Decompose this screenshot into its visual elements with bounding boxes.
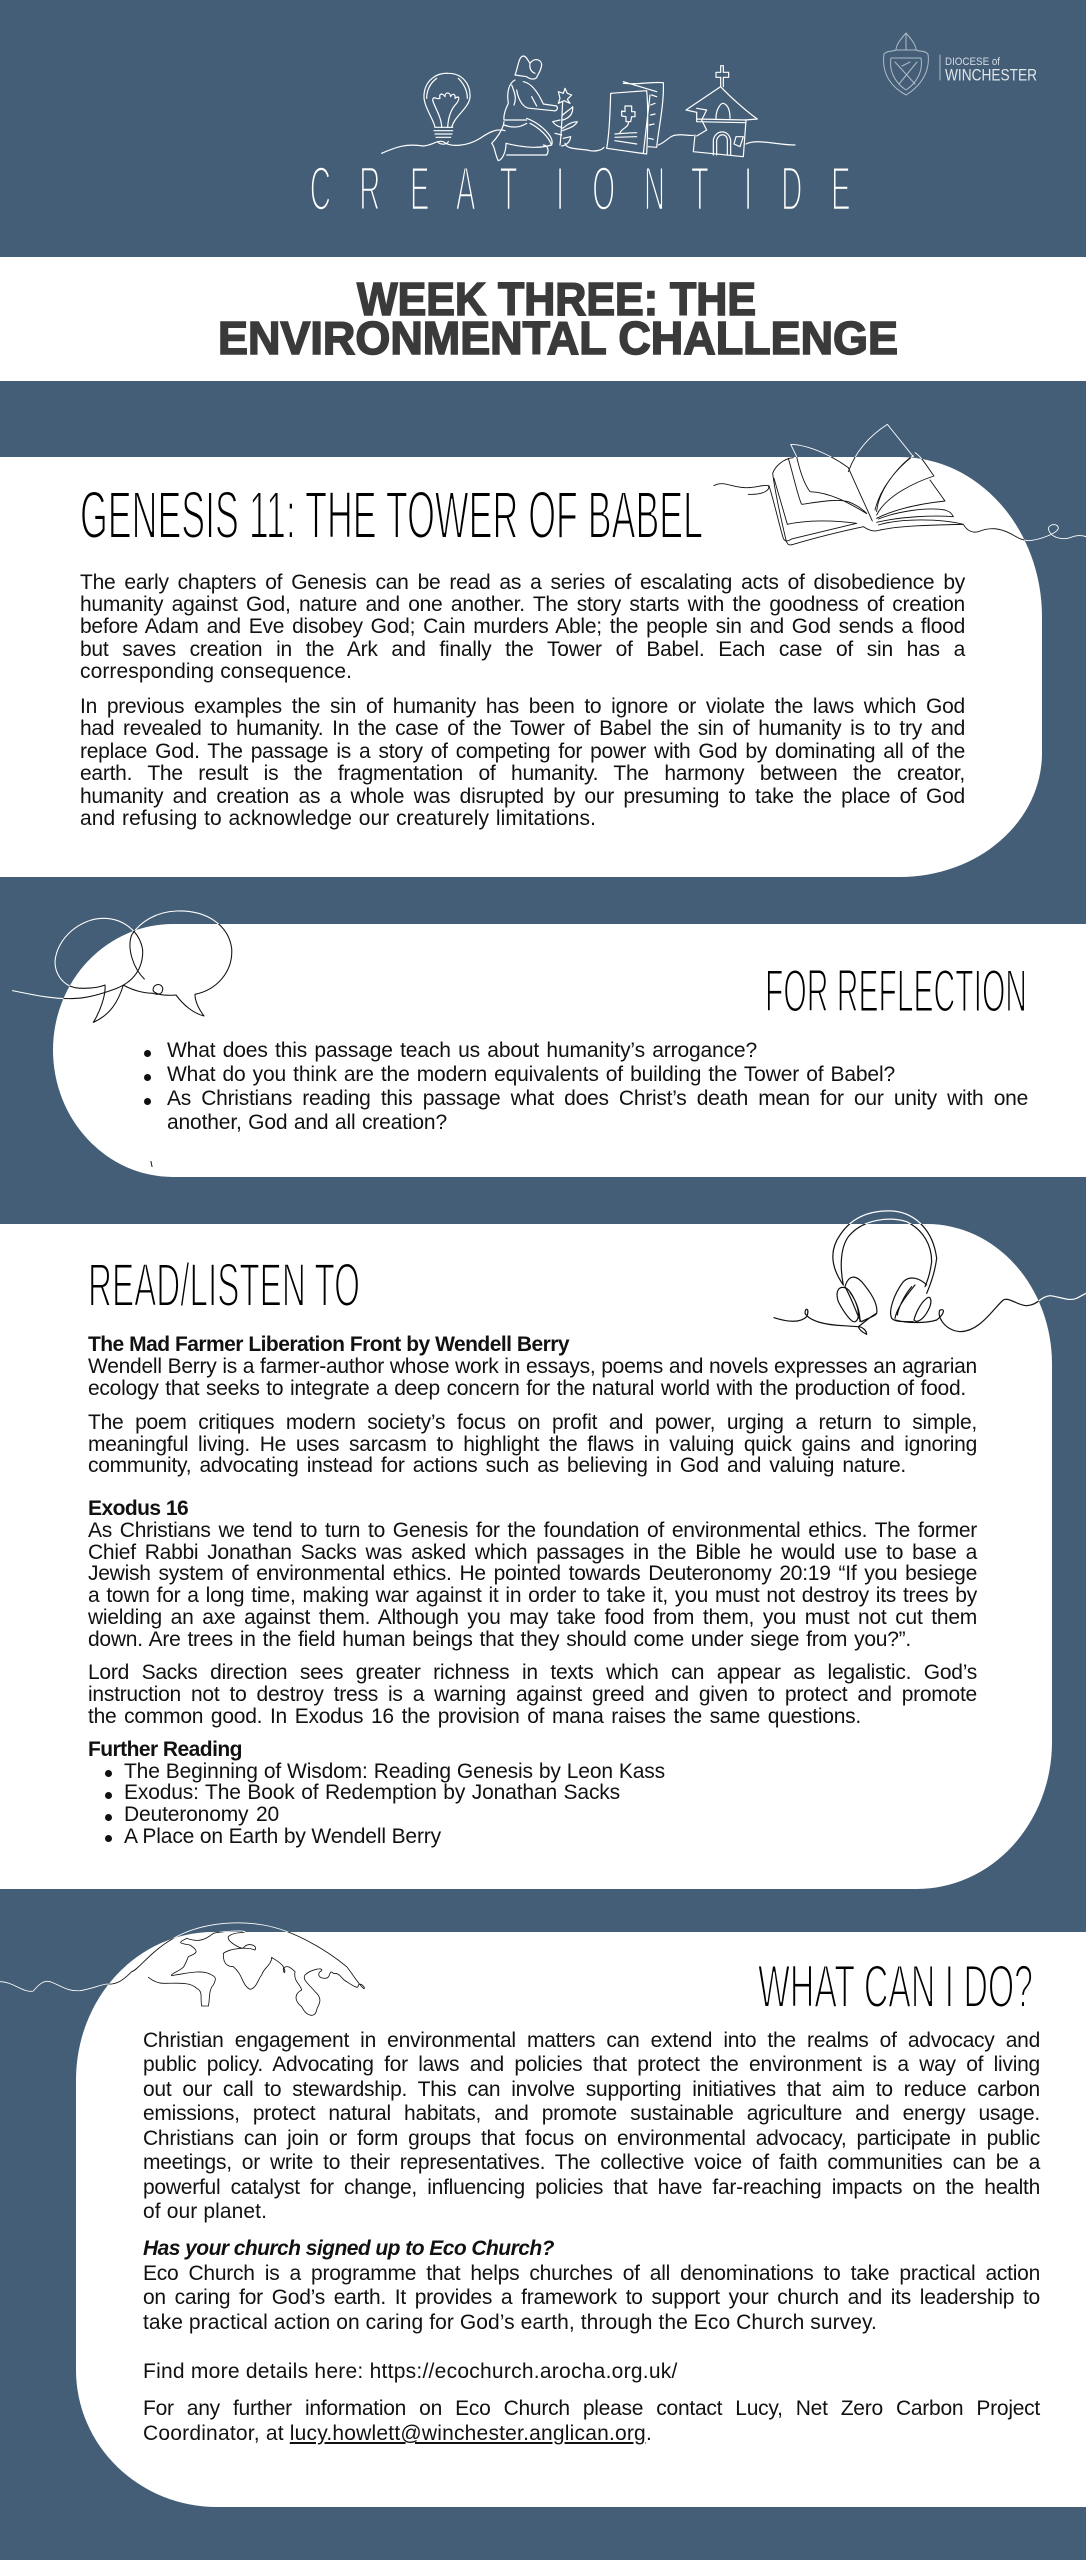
list: reflection questions: What does this passage teach us about humanity’s arrogance? — [167, 1039, 757, 1062]
text: poem critique — [88, 1411, 977, 1477]
text: exodus 16: Exodus 16 — [88, 1497, 188, 1520]
text: christian engagement: Christians can join or form groups that focus on environmental advocacy, participate in public — [143, 2127, 1040, 2150]
heading: week three, the environmental challenge: WEEK THREE: THE — [357, 273, 756, 325]
text: exodus 16: a town for a long time, making war against it in order to take it, you must not destroy its trees by — [88, 1584, 977, 1607]
heading: week three, the environmental challenge: ENVIRONMENTAL CHALLENGE — [218, 312, 898, 364]
text: genesis paragraph one: before Adam and Eve disobey God; Cain murders Able; the people sin and God sends a flood — [80, 615, 965, 638]
text: exodus 16: Chief Rabbi Jonathan Sacks was asked which passages in the Bible he would use to base a — [88, 1541, 977, 1564]
header banner — [0, 0, 1086, 257]
text: genesis paragraph two: earth. The result is the fragmentation of humanity. The harmony between the creator, — [80, 762, 965, 785]
text: christian engagement: out our call to stewardship. This can involve supporting initiatives that aim to reduce carbon — [143, 2078, 1040, 2101]
logo: diocese of winchester: WINCHESTER — [945, 66, 1037, 84]
header illustration: bulb, gardener, bible, church — [381, 55, 796, 162]
text: lord sacks direction: instruction not to destroy tress is a warning against greed and given to protect and promote — [88, 1683, 977, 1706]
icon: headphones — [773, 1210, 1086, 1335]
text: exodus 16: down. Are trees in the field human beings that they should come under siege from you?”. — [88, 1628, 911, 1651]
icon: open book — [714, 424, 1086, 546]
text: genesis paragraph one: but saves creation in the Ark and finally the Tower of Babel. Each case of sin has a — [80, 638, 965, 661]
panel: genesis 11 — [0, 457, 1042, 877]
text: genesis paragraph two: In previous examples the sin of humanity has been to ignore or violate the laws which God — [80, 694, 965, 718]
text: christian engagement: of our planet. — [143, 2200, 267, 2223]
text: contact details: For any further information on Eco Church please contact Lucy, Net Zero Carbon Project — [143, 2397, 1040, 2420]
list: reflection questions: As Christians reading this passage what does Christ’s death mean for our unity with one — [167, 1087, 1028, 1110]
logo: diocese of winchester — [883, 32, 1037, 96]
list: further reading: The Beginning of Wisdom: Reading Genesis by Leon Kass — [124, 1760, 665, 1783]
text: mad farmer liberation front: Wendell Berry is a farmer-author whose work in essays, poems and novels expresses an agrarian — [88, 1355, 977, 1378]
text: poem critique: community, advocating instead for actions such as believing in God and valuing nature. — [88, 1454, 906, 1477]
text: christian engagement — [143, 2029, 1040, 2223]
logo: diocese of winchester: DIOCESE of — [945, 56, 1001, 68]
text: find more details: Find more details here: https://ecochurch.arocha.org.uk/ — [143, 2360, 678, 2383]
heading: week three, the environmental challenge — [218, 273, 898, 364]
text: christian engagement: public policy. Advocating for laws and policies that protect the environment is a way of living — [143, 2053, 1040, 2076]
text: genesis paragraph one: corresponding consequence. — [80, 660, 352, 683]
text: contact details — [143, 2397, 1040, 2445]
text: genesis paragraph two: humanity and creation as a whole was disrupted by our presuming to take the place of God — [80, 784, 965, 808]
list: reflection questions — [144, 1039, 1028, 1134]
panel: what can i do — [76, 1932, 1086, 2507]
text: eco church: on caring for God’s earth. It provides a framework to support your church and its leadership to — [143, 2286, 1040, 2309]
text: mad farmer liberation front: The Mad Farmer Liberation Front by Wendell Berry — [88, 1333, 569, 1356]
text: eco church — [143, 2237, 1040, 2334]
text: christian engagement: meetings, or write to their representatives. The collective voice of faith communities can be a — [143, 2151, 1040, 2174]
text: genesis paragraph two: replace God. The passage is a story of competing for power with God by dominating all of the — [80, 740, 965, 762]
text: christian engagement: Christian engagement in environmental matters can extend into the realms of advocacy and — [143, 2029, 1040, 2052]
text: genesis paragraph one — [80, 570, 966, 683]
list: further reading: Exodus: The Book of Redemption by Jonathan Sacks — [124, 1781, 620, 1804]
text: contact details: Coordinator, at lucy.howlett@winchester.anglican.org. — [143, 2422, 652, 2445]
text: genesis paragraph two: had revealed to humanity. In the case of the Tower of Babel the sin of humanity is to try and — [80, 717, 965, 740]
text: eco church: Eco Church is a programme that helps churches of all denominations to take practical action — [143, 2262, 1040, 2285]
text: genesis paragraph one: humanity against God, nature and one another. The story starts with the goodness of creation — [80, 593, 965, 616]
heading: read/listen to: READ/LISTEN TO — [88, 1251, 360, 1319]
text: exodus 16: As Christians we tend to turn to Genesis for the foundation of environmental ethics. The former — [88, 1519, 977, 1542]
icon: speech bubbles — [12, 910, 232, 1023]
text: lord sacks direction: Lord Sacks direction sees greater richness in texts which can appear as legalistic. God’s — [88, 1661, 977, 1684]
list: reflection questions: What do you think are the modern equivalents of building the Tower of Babel? — [167, 1063, 895, 1086]
text: exodus 16 — [88, 1497, 978, 1651]
text: genesis paragraph one: The early chapters of Genesis can be read as a series of escalating acts of disobedience by — [80, 570, 965, 594]
text: christian engagement: emissions, protect natural habitats, and promote sustainable agriculture and energy usage. — [143, 2102, 1040, 2125]
text: eco church: take practical action on caring for God’s earth, through the Eco Church survey. — [143, 2311, 877, 2334]
list: further reading: A Place on Earth by Wendell Berry — [124, 1825, 441, 1848]
list: reflection questions: another, God and all creation? — [167, 1111, 447, 1134]
text: eco church: Has your church signed up to Eco Church? — [143, 2237, 554, 2260]
text: genesis paragraph two: and refusing to acknowledge our creaturely limitations. — [80, 807, 596, 830]
text: mad farmer liberation front — [88, 1333, 977, 1400]
text: poem critique: The poem critiques modern society’s focus on profit and power, urging a return to simple, — [88, 1411, 977, 1434]
band: week heading — [0, 257, 1086, 381]
text: lord sacks direction: the common good. In Exodus 16 the provision of mana raises the same questions. — [88, 1705, 861, 1728]
text: exodus 16: Jewish system of environmental ethics. He pointed towards Deuteronomy 20:19 “If you besiege — [88, 1562, 977, 1585]
text: lord sacks direction — [88, 1661, 977, 1728]
list: further reading — [88, 1738, 665, 1848]
panel: read and listen — [0, 1224, 1052, 1889]
text: poem critique: meaningful living. He uses sarcasm to highlight the flaws in valuing quick gains and ignoring — [88, 1433, 977, 1456]
list: further reading: Further Reading — [88, 1738, 242, 1761]
icon: globe — [0, 1922, 365, 2016]
list: further reading: Deuteronomy 20 — [124, 1803, 279, 1826]
title: creationtide: CREATIONTIDE — [310, 155, 851, 224]
text: exodus 16: wielding an axe against them. Although you may take food from them, you must not cut them — [88, 1606, 977, 1629]
panel: for reflection — [53, 924, 1086, 1177]
text: genesis paragraph two — [80, 694, 965, 830]
text: mad farmer liberation front: ecology that seeks to integrate a deep concern for the natural world with the production of food. — [88, 1377, 966, 1400]
text: christian engagement: powerful catalyst for change, influencing policies that have far-reaching impacts on the health — [143, 2176, 1040, 2199]
